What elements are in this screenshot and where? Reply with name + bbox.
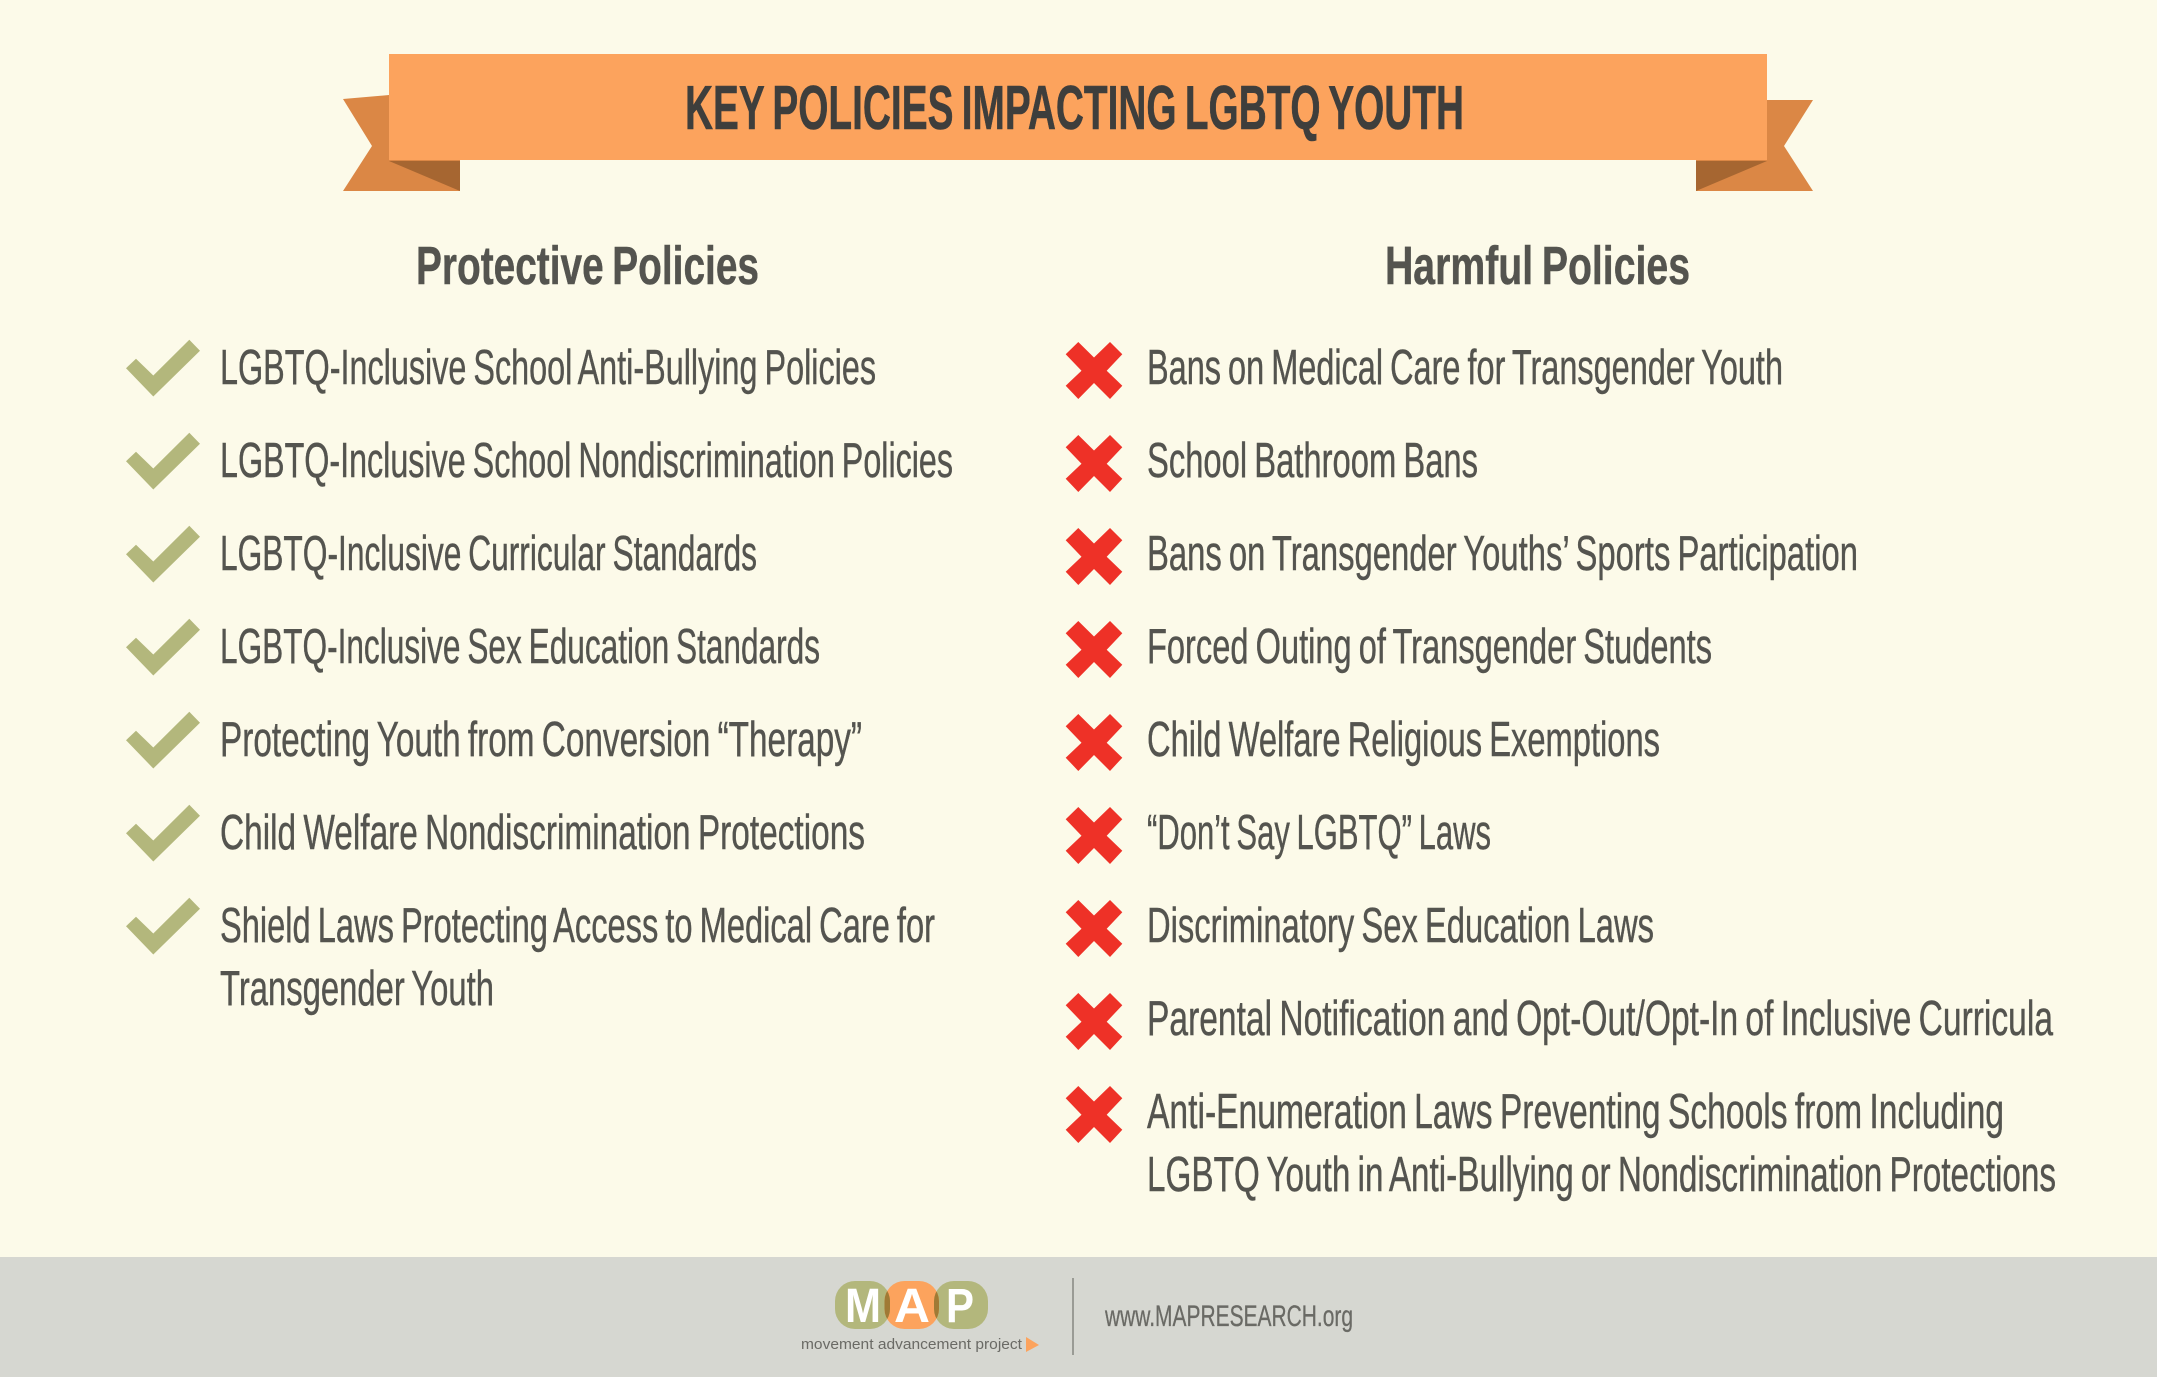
- item 1: [1066, 340, 1783, 399]
- item 3: LGBTQ-Inclusive Curricular Standards: [220, 526, 757, 581]
- footer bar: [0, 1257, 2157, 1377]
- item 2: School Bathroom Bans: [1147, 433, 1478, 488]
- item 5: Child Welfare Religious Exemptions: [1147, 712, 1660, 767]
- MAP logo: P: [946, 1280, 974, 1333]
- item 2: [1066, 433, 1478, 492]
- heading: protective policies: Protective Policies: [416, 236, 759, 296]
- item 5: [1066, 712, 1660, 771]
- item 7: Transgender Youth: [220, 961, 494, 1016]
- item 2: LGBTQ-Inclusive School Nondiscrimination Policies: [220, 433, 953, 488]
- item 7: [126, 898, 935, 1016]
- item 7: [1066, 898, 1654, 957]
- MAP logo: A: [894, 1280, 930, 1333]
- item 5: Protecting Youth from Conversion “Therapy”: [220, 712, 862, 767]
- ribbon tail right: [1696, 100, 1813, 191]
- item 6: Child Welfare Nondiscrimination Protections: [220, 805, 865, 860]
- item 4: LGBTQ-Inclusive Sex Education Standards: [220, 619, 820, 674]
- item 4: [1066, 619, 1712, 678]
- ribbon fold right: [1696, 161, 1767, 191]
- item 1: Bans on Medical Care for Transgender Youth: [1147, 340, 1783, 395]
- item 6: [126, 805, 865, 862]
- panel: harmful policies: [1066, 236, 2056, 1202]
- item 5: [126, 712, 862, 768]
- MAP logo: movement advancement project: [801, 1336, 1023, 1353]
- item 7: Shield Laws Protecting Access to Medical Care for: [220, 898, 935, 953]
- ribbon tail left: [343, 95, 460, 191]
- item 4: [126, 619, 820, 676]
- item 7: Discriminatory Sex Education Laws: [1147, 898, 1654, 953]
- item 3: [1066, 526, 1858, 585]
- MAP logo: [801, 1280, 1039, 1353]
- panel: protective policies: [126, 236, 953, 1016]
- heading: harmful policies: Harmful Policies: [1385, 236, 1690, 296]
- item 6: [1066, 805, 1491, 864]
- ribbon body: [389, 54, 1767, 160]
- title: KEY POLICIES IMPACTING LGBTQ YOUTH: [685, 73, 1464, 143]
- MAP logo: M: [845, 1280, 881, 1333]
- item 1: [126, 340, 876, 396]
- website url: www.MAPRESEARCH.org: [1104, 1300, 1353, 1333]
- item 6: “Don’t Say LGBTQ” Laws: [1147, 805, 1491, 860]
- item 4: Forced Outing of Transgender Students: [1147, 619, 1712, 674]
- item 9: [1066, 1084, 2056, 1202]
- item 3: [126, 526, 757, 582]
- item 2: [126, 433, 953, 490]
- ribbon fold left: [389, 161, 460, 191]
- item 1: LGBTQ-Inclusive School Anti-Bullying Policies: [220, 340, 876, 395]
- title banner: [343, 54, 1813, 191]
